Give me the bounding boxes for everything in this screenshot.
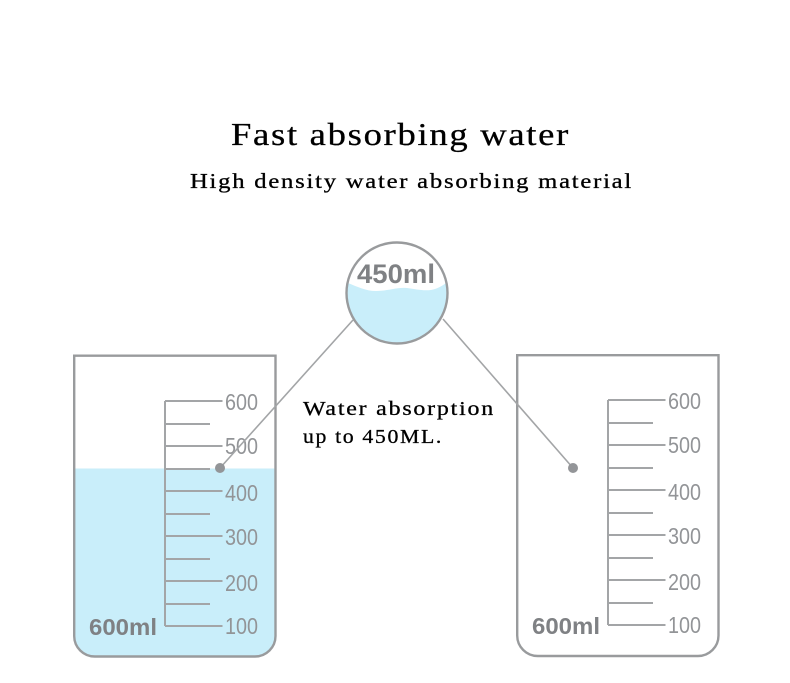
beaker outline [517, 355, 718, 656]
absorption note [303, 398, 495, 448]
scale numbers: 400 [225, 480, 258, 506]
scale numbers: 300 [225, 524, 258, 550]
scale numbers: 500 [668, 432, 701, 458]
absorption note: up to 450ML. [303, 426, 443, 448]
connector line to left beaker [215, 320, 353, 473]
right empty beaker [517, 355, 718, 656]
450ml circle [346, 242, 448, 344]
scale numbers [668, 388, 701, 638]
scale numbers: 500 [225, 433, 258, 459]
scale numbers: 400 [668, 479, 701, 505]
measurement scale [165, 401, 222, 626]
scale numbers: 200 [668, 569, 701, 595]
connector line to right beaker [443, 319, 578, 473]
scale numbers: 300 [668, 523, 701, 549]
left beaker with water [74, 356, 276, 656]
water fill [75, 468, 275, 656]
scale numbers: 100 [225, 613, 258, 639]
scale numbers: 100 [668, 612, 701, 638]
circle label: 450ml [357, 259, 435, 289]
measurement scale [608, 400, 666, 625]
title: Fast absorbing water [231, 116, 570, 152]
circle outline [346, 242, 448, 344]
scale numbers: 200 [225, 570, 258, 596]
capacity label: 600ml [532, 613, 600, 639]
capacity label: 600ml [89, 614, 157, 640]
absorption note: Water absorption [303, 398, 495, 420]
subtitle: High density water absorbing material [190, 169, 633, 193]
water in circle [347, 283, 447, 343]
scale numbers: 600 [668, 388, 701, 414]
beaker outline [74, 356, 276, 656]
scale numbers: 600 [225, 389, 258, 415]
scale numbers [225, 389, 258, 639]
